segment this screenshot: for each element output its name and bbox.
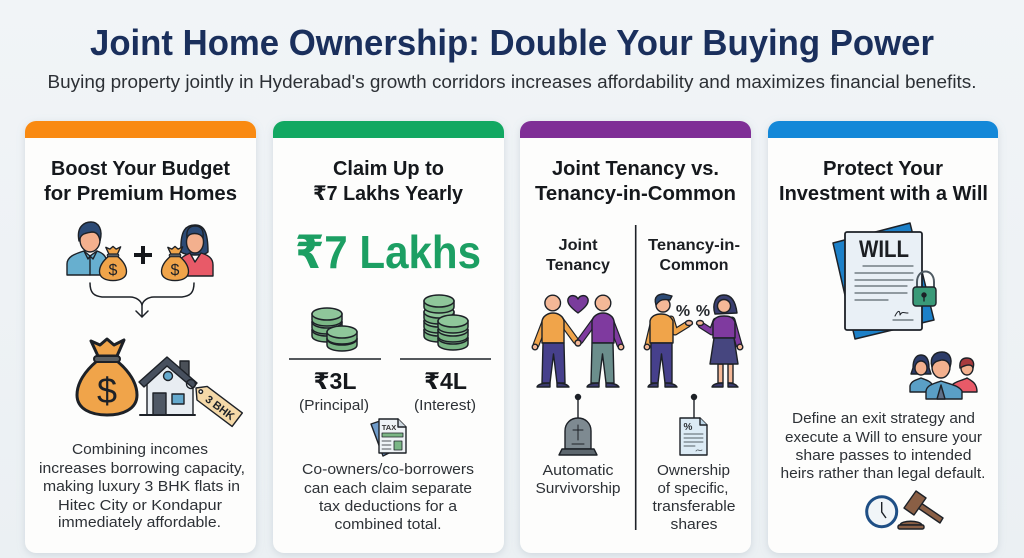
card 1 heading: Boost Your Budget [51, 158, 230, 180]
card 4 body text [780, 410, 986, 482]
card 1 heading: for Premium Homes [44, 183, 237, 205]
title: Joint Home Ownership: Double Your Buying Power [90, 22, 934, 63]
card 4 heading: Protect Your [823, 158, 943, 180]
card 3 purple header band [520, 121, 751, 138]
icon: small coin stacks [312, 308, 357, 351]
panel: protect your investment [768, 121, 998, 553]
card 4 heading: Investment with a Will [779, 183, 988, 205]
card 2 body text: can each claim separate [304, 480, 472, 497]
card 3 heading [535, 158, 736, 205]
card 2 body text: Co-owners/co-borrowers [302, 461, 474, 478]
card 1 orange header band [25, 121, 256, 138]
principal column [289, 359, 381, 414]
tenancy in common subheading: Common [660, 257, 728, 274]
icon: two owners with percent shares: % [696, 303, 710, 320]
big figure: 7 lakhs: ₹7 Lakhs [295, 226, 481, 278]
card 1 body text: making luxury 3 BHK flats in [43, 478, 240, 495]
icon: share document with connector [680, 394, 707, 455]
interest column: (Interest) [414, 397, 476, 414]
icon: house with 3 BHK tag [139, 357, 242, 426]
panel: claim up to 7 lakhs [273, 121, 504, 553]
tenancy in common subheading: Tenancy-in- [648, 237, 740, 254]
interest column [400, 359, 491, 414]
joint tenancy subheading: Joint [558, 237, 598, 254]
tenancy in common subheading [648, 237, 740, 274]
card 2 heading: ₹7 Lakhs Yearly [313, 183, 464, 205]
card 3 heading: Joint Tenancy vs. [552, 158, 719, 180]
card 2 background [273, 121, 504, 553]
tenancy in common caption: transferable [652, 498, 736, 515]
icon: large coin stacks [424, 295, 468, 350]
price tag: 3 BHK [203, 394, 236, 423]
card 4 body text: execute a Will to ensure your [785, 429, 982, 446]
card 1 body text: Combining incomes [72, 441, 208, 458]
icon: gravestone with connector [559, 394, 597, 455]
tenancy in common caption [652, 462, 736, 533]
card 1 body text: Hitec City or Kondapur [58, 497, 222, 514]
card 4 blue header band [768, 121, 998, 138]
card 2 heading: Claim Up to [333, 158, 444, 180]
column divider [635, 225, 637, 530]
principal column: (Principal) [299, 397, 369, 414]
tenancy in common caption: of specific, [658, 480, 728, 497]
card 3 heading: Tenancy-in-Common [535, 183, 736, 205]
icon: heirs group [910, 352, 977, 399]
icon: large money bag [77, 339, 137, 415]
principal column: ₹3L [314, 368, 356, 394]
card 4 body text: Define an exit strategy and [792, 410, 975, 427]
icon: will document with lock [833, 223, 936, 339]
tenancy in common caption: shares [670, 516, 718, 533]
icon: tax form [371, 419, 406, 456]
icon: clock [867, 497, 897, 527]
card 4 body text: heirs rather than legal default. [780, 465, 986, 482]
arrow: combining brace [90, 283, 194, 317]
icon: man with money bag [67, 222, 126, 281]
icon: plus sign [134, 246, 152, 264]
card 2 body text [302, 461, 474, 533]
icon: tax form: TAX [382, 423, 396, 432]
card 1 body text [39, 441, 245, 531]
card 1 body text: increases borrowing capacity, [39, 460, 245, 477]
card 1 background [25, 121, 256, 553]
subtitle: Buying property jointly in Hyderabad's growth corridors increases affordability and maximizes financial benefits. [48, 72, 976, 92]
card 1 body text: immediately affordable. [58, 514, 221, 531]
icon: gavel [898, 491, 943, 529]
icon: two owners with percent shares [644, 294, 743, 387]
icon: man with money bag: $ [109, 262, 118, 279]
card 2 body text: tax deductions for a [319, 498, 458, 515]
icon: will document with lock: WILL [859, 236, 909, 263]
panel: boost your budget [25, 121, 256, 553]
card 4 heading [779, 158, 988, 205]
card 1 heading [44, 158, 237, 205]
card 2 heading [313, 158, 464, 205]
icon: share document with connector: % [684, 422, 693, 433]
panel: joint tenancy vs tenancy in common [520, 121, 751, 553]
joint tenancy caption [536, 462, 620, 497]
interest column: ₹4L [424, 368, 467, 394]
card 4 body text: share passes to intended [796, 447, 972, 464]
icon: woman with money bag [162, 225, 213, 281]
card 2 green header band [273, 121, 504, 138]
icon: couple holding hands with heart [532, 295, 624, 387]
card 4 background [768, 121, 998, 553]
joint tenancy subheading: Tenancy [546, 257, 610, 274]
joint tenancy caption: Automatic [542, 462, 614, 479]
card 2 body text: combined total. [334, 516, 442, 533]
tenancy in common caption: Ownership [657, 462, 730, 479]
card 3 background [520, 121, 751, 553]
icon: woman with money bag: $ [171, 262, 180, 279]
joint tenancy caption: Survivorship [536, 480, 620, 497]
icon: large money bag: $ [97, 370, 117, 411]
icon: two owners with percent shares: % [676, 303, 690, 320]
joint tenancy subheading [546, 237, 610, 274]
